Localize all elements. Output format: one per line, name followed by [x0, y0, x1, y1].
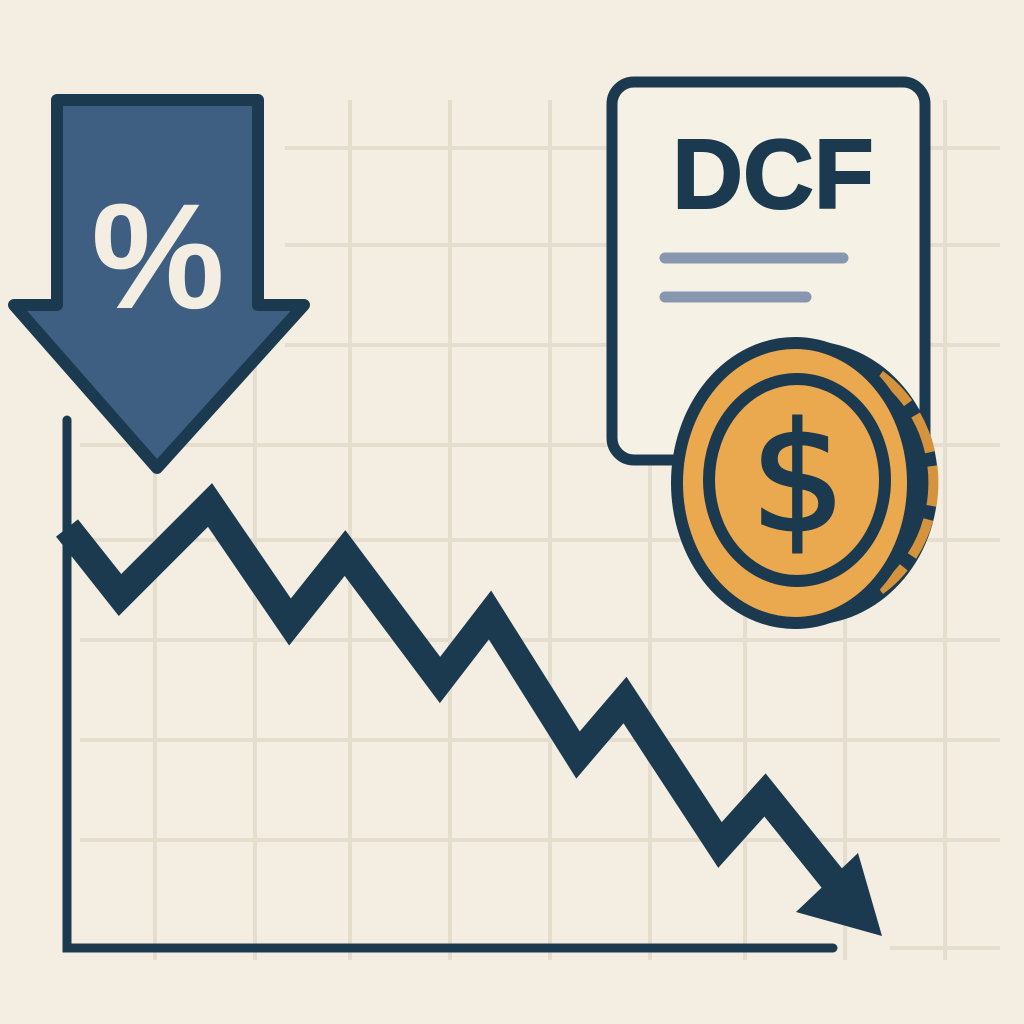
chart axes: [67, 420, 833, 948]
DCF heading: DCF: [672, 119, 874, 229]
document: DCF: [612, 82, 925, 460]
icon: percent down arrow: [14, 100, 304, 468]
icon: dollar coin: $: [750, 392, 846, 566]
declining trend line with arrow: [67, 505, 882, 936]
text lines: [665, 258, 843, 297]
percent sign: %: [91, 172, 225, 340]
icon: dollar coin: [677, 341, 938, 625]
